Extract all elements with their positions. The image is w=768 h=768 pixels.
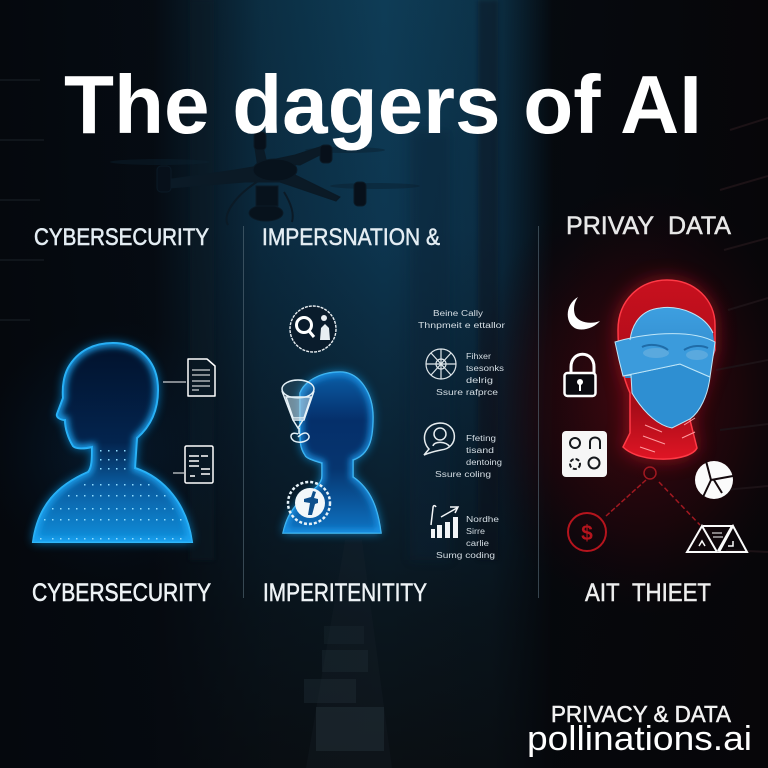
icon: dollar circle [568,513,606,551]
list item 2: tisand [466,446,494,455]
list item 3: Sumg coding [436,551,495,560]
list item 1: delrig [466,376,493,385]
person inner glow [33,343,192,542]
icon: controls tile [562,431,607,477]
icon: funnel lamp [282,380,314,442]
panel: cybersecurity person [33,343,192,542]
list item 2 [424,423,502,479]
mask upper [625,307,715,378]
watermark: pollinations.ai [527,720,752,758]
red head [618,280,715,459]
mask band [615,334,715,377]
label: cybersecurity bottom: CYBERSECURITY [32,579,211,607]
panel: mini list [418,309,505,560]
icon: padlock [564,354,596,396]
list item 1 [426,349,504,397]
icon: search badge [290,306,336,352]
list item 1: tsesonks [466,364,504,373]
mask lower [623,364,710,428]
label: imperitenitity: IMPERITENITITY [263,579,427,607]
list item 1: Ssure rafprce [436,388,499,397]
icon: document with connector [163,359,215,396]
person body [283,372,381,533]
list item 3 [431,506,500,560]
list heading [418,309,505,330]
mask eyes [643,348,669,358]
drone [110,132,420,225]
person dot pattern [40,450,182,540]
person body [33,343,192,542]
head glow [618,280,715,459]
list item 2: dentoing [466,458,502,467]
list item 3: Sirre [466,527,486,536]
list item 2: Ssure coling [435,470,491,479]
icon: pie chart [695,461,733,499]
person glow [283,372,381,533]
column divider left [243,226,244,598]
list item 2: Ffeting [466,434,496,443]
panel: masked head [615,280,715,459]
panel: impersonation person [283,372,381,533]
person inner glow [283,372,381,533]
person glow [33,343,192,542]
neck lines [640,418,695,452]
list item 1: Fihxer [466,352,491,361]
heading: privacy data: PRIVAY DATA [566,212,731,240]
label: privacy and data: PRIVACY & DATA [551,701,732,727]
list item 3: carlie [466,539,490,548]
list item 3: Nordhe [466,515,500,524]
icon: triangles [687,526,747,552]
icon: report with connector [173,446,213,483]
network connector lines [606,467,700,525]
list heading: Beine Cally [433,309,483,318]
heading: impersonation: IMPERSNATION & [262,224,440,251]
icon: cross badge [288,482,330,524]
title: The dagers of AI [64,58,702,151]
icon: crescent moon [568,297,600,330]
heading: cybersecurity top: CYBERSECURITY [34,224,209,251]
icon: dollar circle: $ [581,522,593,545]
label: ait thieet: AIT THIEET [585,579,711,607]
column divider right [538,226,539,598]
mask top edge [630,307,713,340]
list heading: Thnpmeit e ettallor [418,321,505,330]
